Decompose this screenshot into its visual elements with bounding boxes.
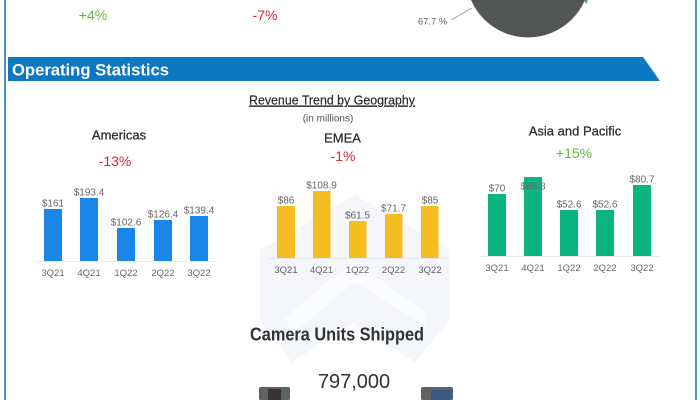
bar chart: EMEA: $85 xyxy=(422,196,439,206)
change: left metric: +4% xyxy=(79,7,107,23)
bar chart: Americas: 1Q22 xyxy=(114,268,138,279)
bar chart: EMEA: $61.5 xyxy=(345,210,370,222)
bar chart: Americas: 2Q22 xyxy=(151,268,175,279)
bar chart: EMEA: 3Q22 xyxy=(418,265,442,276)
bar chart: EMEA: $86 xyxy=(278,196,295,206)
bar chart: Americas: $126.4 xyxy=(148,210,179,220)
bar chart: Asia and Pacific: $80.7 xyxy=(629,174,655,186)
watermark logo xyxy=(260,195,450,362)
bar chart: Americas: $102.6 xyxy=(111,218,142,228)
panel: Asia and Pacific xyxy=(480,124,660,274)
pie chart xyxy=(418,0,590,38)
panel: EMEA xyxy=(268,130,447,276)
bar chart: EMEA: 4Q21 xyxy=(310,265,333,276)
bar chart: EMEA: 3Q21 xyxy=(274,265,298,276)
chart title: Revenue Trend by Geography xyxy=(249,94,416,108)
bar chart: Americas: 3Q22 xyxy=(187,268,211,279)
heading: Americas: Americas xyxy=(92,128,147,142)
heading: Camera Units Shipped: Camera Units Shipped xyxy=(250,324,424,344)
chart subtitle: (in millions) xyxy=(303,114,353,124)
bar chart: Americas: 3Q21 xyxy=(41,268,65,279)
bar chart: EMEA: $108.9 xyxy=(306,180,337,192)
bar chart: EMEA: $71.7 xyxy=(381,204,406,214)
section banner: Operating Statistics xyxy=(8,57,660,81)
bar chart: Asia and Pacific: $88.8 xyxy=(520,182,546,192)
change: Asia and Pacific: +15% xyxy=(556,145,592,161)
bar chart: EMEA: 1Q22 xyxy=(346,265,369,276)
bar chart: Asia and Pacific: 3Q22 xyxy=(630,263,654,274)
bar chart: EMEA xyxy=(268,180,447,276)
bar chart: Asia and Pacific: $52.6 xyxy=(592,200,618,210)
change: Americas: -13% xyxy=(99,153,131,169)
change: middle metric: -7% xyxy=(253,7,277,23)
bar chart: Asia and Pacific: 2Q22 xyxy=(593,263,617,274)
bar chart: Asia and Pacific: 1Q22 xyxy=(557,263,581,274)
bar chart: Asia and Pacific: $52.6 xyxy=(556,200,582,210)
heading: Asia and Pacific: Asia and Pacific xyxy=(529,124,622,138)
bar chart: EMEA: 2Q22 xyxy=(382,265,405,276)
pie chart: 67.7 % xyxy=(418,16,448,28)
bar chart: Asia and Pacific: $70 xyxy=(489,184,506,194)
heading: EMEA: EMEA xyxy=(324,130,361,146)
bar chart: Asia and Pacific: 3Q21 xyxy=(485,263,509,274)
section banner: Operating Statistics: Operating Statistics xyxy=(12,60,169,80)
number: units shipped: 797,000 xyxy=(318,371,390,393)
bar chart: Americas: 4Q21 xyxy=(77,268,101,279)
bar chart: Asia and Pacific xyxy=(480,174,660,274)
bar chart: Americas: $139.4 xyxy=(184,206,215,216)
bar chart: Americas xyxy=(35,188,217,279)
icon: left camera xyxy=(259,387,290,400)
change: EMEA: -1% xyxy=(331,148,355,164)
bar chart: Americas: $161 xyxy=(42,198,65,210)
bar chart: Asia and Pacific: 4Q21 xyxy=(521,263,545,274)
panel: Americas xyxy=(35,128,217,279)
icon: right camera xyxy=(421,387,453,400)
bar chart: Americas: $193.4 xyxy=(74,188,105,198)
